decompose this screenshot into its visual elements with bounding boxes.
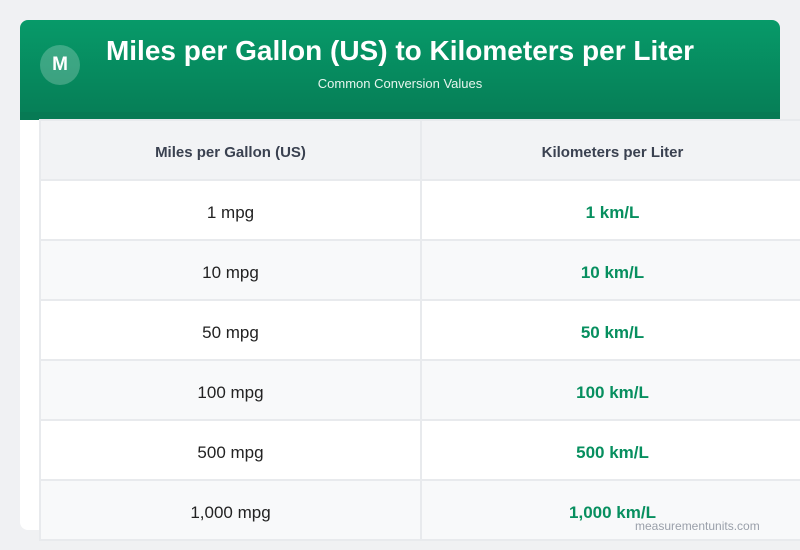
conversion table: Miles per Gallon (US) bbox=[155, 144, 306, 161]
icon: logo: M bbox=[52, 54, 68, 75]
subtitle: Common Conversion Values bbox=[318, 76, 482, 91]
title: Miles per Gallon (US) to Kilometers per Liter bbox=[106, 35, 694, 66]
conversion table: 500 mpg bbox=[197, 442, 264, 462]
header bbox=[20, 20, 780, 112]
conversion table: 1,000 km/L bbox=[569, 502, 656, 522]
conversion table: Kilometers per Liter bbox=[542, 144, 683, 161]
watermark: measurementunits.com bbox=[635, 519, 760, 533]
conversion table: 10 mpg bbox=[202, 262, 259, 282]
conversion table: 50 km/L bbox=[581, 322, 644, 342]
conversion table: 50 mpg bbox=[202, 322, 259, 342]
conversion table: 1,000 mpg bbox=[190, 502, 271, 522]
conversion table: 100 km/L bbox=[576, 382, 649, 402]
icon: logo bbox=[40, 45, 80, 85]
conversion table bbox=[39, 119, 800, 541]
conversion table: 100 mpg bbox=[197, 382, 264, 402]
conversion table: 10 km/L bbox=[581, 262, 644, 282]
conversion table: 500 km/L bbox=[576, 442, 649, 462]
conversion table: 1 mpg bbox=[207, 202, 254, 222]
conversion table: 1 km/L bbox=[586, 202, 639, 222]
